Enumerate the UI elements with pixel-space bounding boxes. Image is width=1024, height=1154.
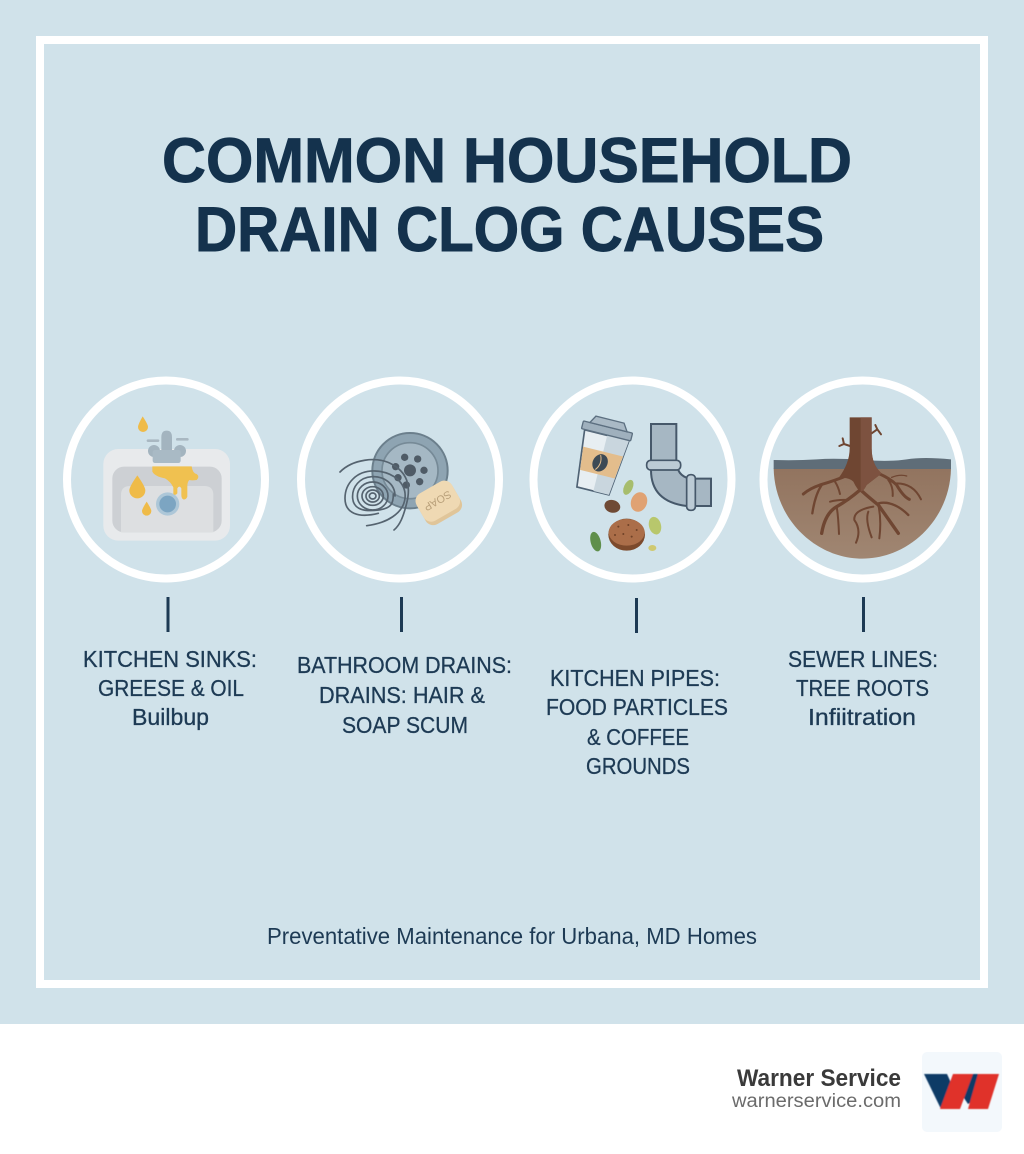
- label: kitchen pipes: & COFFEE: [587, 724, 689, 750]
- label: sewer lines: Infiitration: [808, 704, 916, 730]
- label: sewer lines: TREE ROOTS: [796, 675, 929, 701]
- label: bathroom drains: DRAINS: HAIR &: [319, 682, 485, 708]
- icon: hair, drain and soap: SOAP: [421, 488, 453, 513]
- brand website: warnerservice.com: [731, 1091, 901, 1112]
- tagline: Preventative Maintenance for Urbana, MD Homes: [267, 923, 757, 949]
- connector tick 3: [635, 598, 638, 633]
- label: kitchen sinks: [83, 646, 257, 730]
- title: DRAIN CLOG CAUSES: [195, 195, 824, 265]
- title: [162, 126, 852, 265]
- connector tick 2: [400, 597, 403, 632]
- brand name: Warner Service: [737, 1065, 901, 1092]
- label: sewer lines: SEWER LINES:: [788, 646, 938, 672]
- title: COMMON HOUSEHOLD: [162, 126, 852, 196]
- icon: tree roots in soil: [764, 380, 962, 578]
- label: kitchen pipes: FOOD PARTICLES: [546, 694, 728, 720]
- logo: [922, 1052, 1002, 1132]
- connector tick 1: [166, 597, 170, 632]
- label: bathroom drains: [297, 652, 512, 738]
- label: kitchen sinks: Builbup: [132, 704, 209, 730]
- label: sewer lines: [788, 646, 938, 730]
- footer band: [0, 1024, 1024, 1154]
- label: kitchen pipes: KITCHEN PIPES:: [550, 665, 720, 691]
- icon: hair, drain and soap: [301, 380, 499, 578]
- label: kitchen pipes: [546, 665, 728, 779]
- label: kitchen sinks: KITCHEN SINKS:: [83, 646, 257, 672]
- label: kitchen pipes: GROUNDS: [586, 753, 690, 779]
- icon: coffee cup, pipe and food scraps: [534, 380, 732, 578]
- label: bathroom drains: BATHROOM DRAINS:: [297, 652, 512, 678]
- white frame: [40, 40, 984, 984]
- connector tick 4: [862, 597, 865, 632]
- label: bathroom drains: SOAP SCUM: [342, 712, 468, 738]
- icon: kitchen sink with grease: [67, 380, 265, 578]
- label: kitchen sinks: GREESE & OIL: [98, 675, 244, 701]
